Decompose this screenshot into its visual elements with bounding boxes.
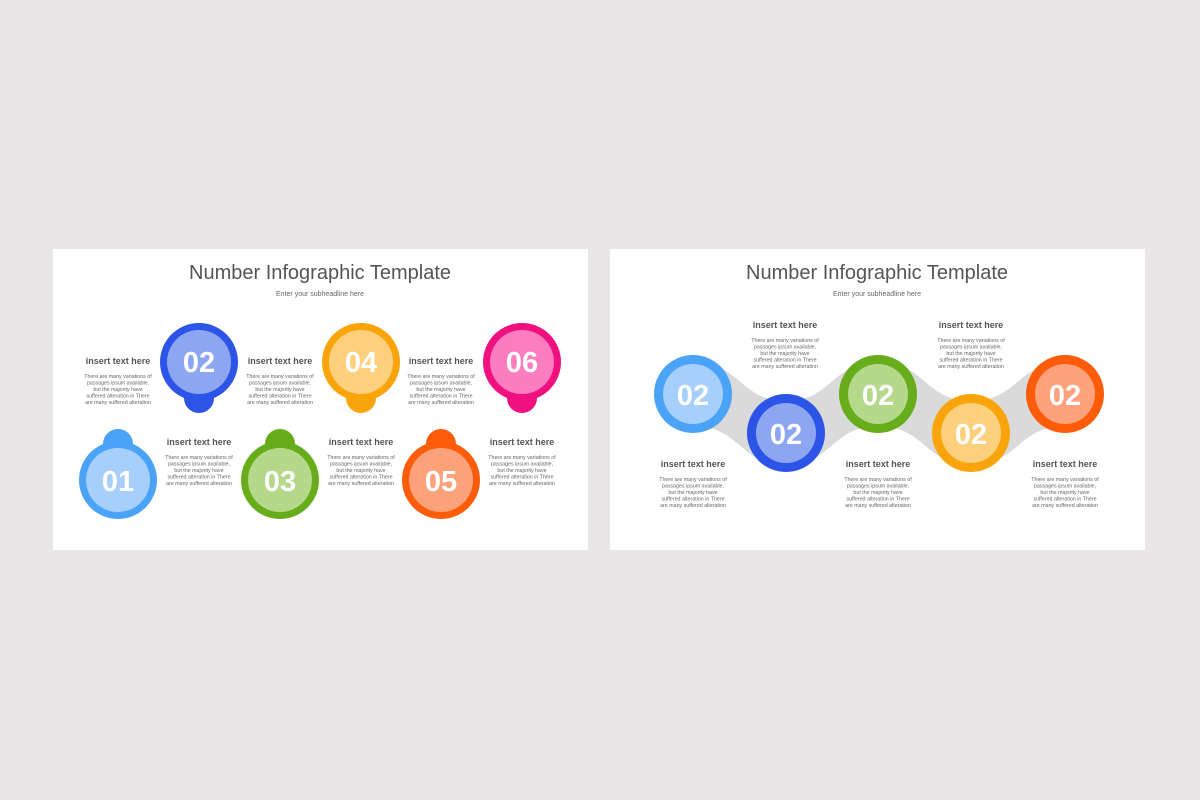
circle 01 [79, 429, 157, 519]
text block 5 [327, 437, 395, 487]
panel: left slide [53, 249, 588, 550]
circle E: 02 [1049, 380, 1081, 412]
text block top 2: insert text here [939, 320, 1003, 330]
text block 4: insert text here [167, 437, 231, 447]
circle C: 02 [862, 380, 894, 412]
circle 04: 04 [345, 347, 377, 379]
circle D: 02 [955, 419, 987, 451]
circle 05: 05 [425, 466, 457, 498]
text block 6 [488, 437, 556, 487]
text block 2 [246, 356, 314, 406]
text block 2: insert text here [248, 356, 312, 366]
subtitle right: Enter your subheadline here [833, 291, 921, 298]
title left: Number Infographic Template [189, 262, 451, 284]
text block bottom 2: insert text here [846, 459, 910, 469]
text block bottom 2 [844, 459, 912, 509]
text block top 1: insert text here [753, 320, 817, 330]
text block bottom 1 [659, 459, 727, 509]
text block 5: insert text here [329, 437, 393, 447]
circle 03: 03 [264, 466, 296, 498]
circle E [1026, 355, 1104, 433]
circle 06: 06 [506, 347, 538, 379]
circle 04 [322, 323, 400, 413]
circle 05 [402, 429, 480, 519]
text block 6: insert text here [490, 437, 554, 447]
subtitle left: Enter your subheadline here [276, 291, 364, 298]
text block top 1 [751, 320, 819, 370]
text block 3: insert text here [409, 356, 473, 366]
circle C [839, 355, 917, 433]
text block bottom 1: insert text here [661, 459, 725, 469]
circle B [747, 394, 825, 472]
text block 4 [165, 437, 233, 487]
text block bottom 3 [1031, 459, 1099, 509]
text block 1 [84, 356, 152, 406]
circle 01: 01 [102, 466, 134, 498]
text block 3 [407, 356, 475, 406]
text block bottom 3: insert text here [1033, 459, 1097, 469]
grey connector band [693, 362, 1065, 465]
panel: right slide [610, 249, 1145, 550]
circle 02 [160, 323, 238, 413]
circle D [932, 394, 1010, 472]
circle 06 [483, 323, 561, 413]
circle A: 02 [677, 380, 709, 412]
circle B: 02 [770, 419, 802, 451]
text block top 2 [937, 320, 1005, 370]
circle 02: 02 [183, 347, 215, 379]
circle 03 [241, 429, 319, 519]
text block 1: insert text here [86, 356, 150, 366]
title right: Number Infographic Template [746, 262, 1008, 284]
circle A [654, 355, 732, 433]
